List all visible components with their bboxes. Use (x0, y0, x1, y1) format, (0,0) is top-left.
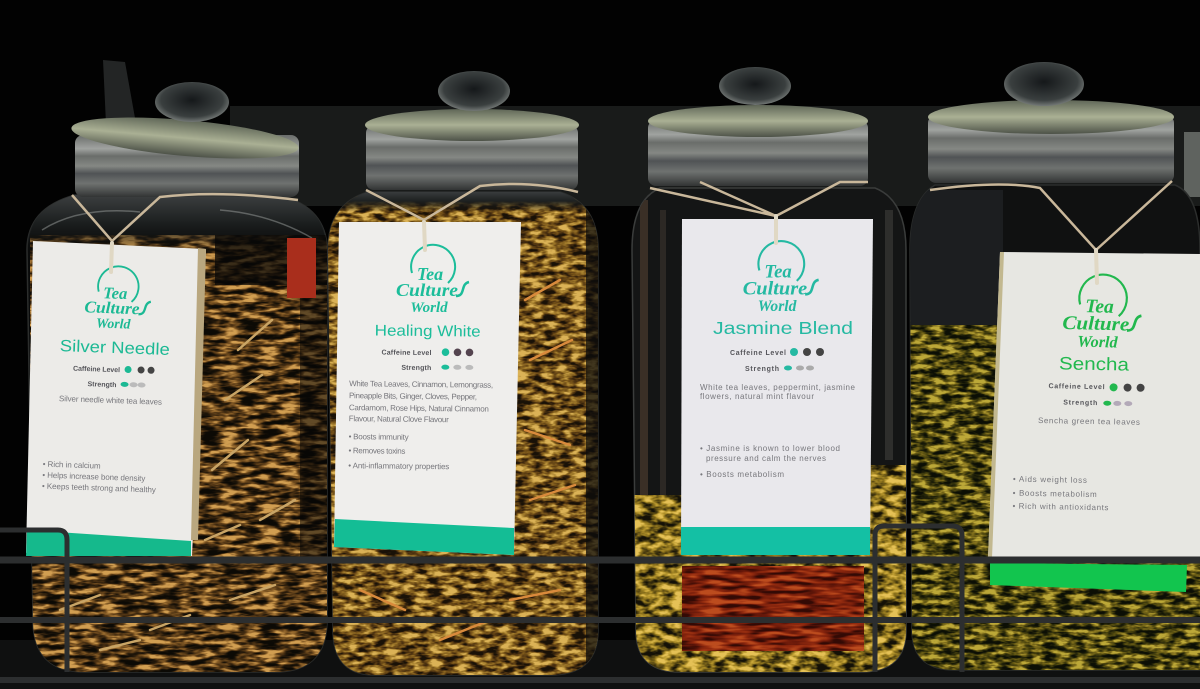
tag 3 text: pressure and calm the nerves (706, 454, 826, 463)
tag 1 logo: Culture (84, 297, 140, 318)
tag 1 text: • Helps increase bone density (42, 471, 145, 483)
tag 2 text: • Boosts immunity (349, 432, 409, 442)
tag 4 logo: World (1077, 332, 1119, 352)
tag 1 text: • Keeps teeth strong and healthy (42, 482, 156, 495)
tag 3 card (681, 219, 873, 555)
jar 3 (632, 67, 908, 675)
tag 4 colour band (990, 563, 1187, 592)
tag 4 text: • Boosts metabolism (1013, 489, 1097, 499)
tag 3 text: Jasmine Blend (713, 318, 853, 338)
tag 3 logo: World (758, 298, 797, 315)
tag 2 text: White Tea Leaves, Cinnamon, Lemongrass, (349, 379, 493, 390)
tag: Silver Needle (26, 241, 206, 556)
tag 4 logo (1062, 274, 1142, 352)
jar 2 leaf pieces (360, 280, 575, 640)
jar 3 contents (632, 200, 908, 675)
tag 1 text: Strength (87, 381, 117, 389)
jar 3 body (632, 188, 906, 672)
tag 3 logo (743, 241, 819, 315)
jar 4 neck (928, 115, 1174, 183)
jar 5 sliver (1184, 132, 1200, 197)
tag 2 text: • Anti-inflammatory properties (348, 461, 449, 471)
tag 1 card (26, 241, 206, 556)
tag 3 text: • Jasmine is known to lower blood (700, 444, 840, 453)
tag 4 edge (988, 252, 1004, 558)
jar 2 neck (366, 125, 578, 190)
tag 4 text: • Aids weight loss (1013, 475, 1087, 485)
tag 3 text: • Boosts metabolism (700, 470, 784, 479)
tag 2 text: Flavour, Natural Clove Flavour (349, 414, 449, 424)
tag 2 text: Strength (401, 365, 431, 372)
wire shelf rail (0, 526, 1200, 680)
jar 4 (908, 62, 1200, 675)
tag 4 text: • Rich with antioxidants (1012, 502, 1109, 512)
tag 1 colour band (26, 530, 191, 556)
jar 3 rope (650, 182, 868, 216)
jar 4 tea leaves (908, 190, 1200, 675)
tag 1 logo (84, 265, 152, 332)
tag 4 text: Strength (1063, 399, 1097, 407)
jar 2 tea leaves (320, 190, 600, 678)
jar 2 knob (438, 71, 510, 111)
tag 2 logo (396, 245, 469, 316)
red sticker (287, 238, 316, 298)
jar 2 lid (365, 109, 579, 141)
twine loops through tags (111, 216, 1097, 283)
jar 3 lid (648, 105, 868, 137)
tag 3 text: Caffeine Level (730, 350, 786, 357)
tag 4 card (988, 252, 1200, 560)
jar 2 body (328, 192, 598, 675)
jar 3 neck (648, 120, 868, 186)
tag 2 logo: Culture (396, 280, 458, 300)
tag 2 logo: Tea (417, 264, 443, 284)
tag: Sencha (988, 252, 1200, 592)
jar 4 rope (930, 181, 1172, 250)
tag 2 text: Healing White (375, 322, 481, 341)
tag 2 colour band (334, 519, 514, 555)
tag 2 text: Caffeine Level (381, 350, 432, 357)
tag 3 text (700, 318, 856, 479)
tag 3 text: White tea leaves, peppermint, jasmine (700, 383, 856, 392)
tag 1 logo: Tea (103, 283, 128, 303)
tag 2 card (334, 222, 521, 555)
tag 1 text: Silver needle white tea leaves (59, 394, 162, 407)
jar 2 (320, 71, 600, 678)
tag 1 logo: World (96, 315, 132, 332)
jar 1 knob (155, 82, 229, 122)
tag 3 logo: Culture (743, 278, 807, 299)
tag 4 text: Caffeine Level (1049, 383, 1105, 391)
tag 4 logo: Culture (1062, 313, 1130, 336)
tag 3 text: Strength (745, 366, 779, 373)
tag 1 text: Silver Needle (60, 337, 170, 359)
tag 1 text: Caffeine Level (73, 366, 120, 374)
tag 1 text: • Rich in calcium (43, 460, 101, 471)
jar 1 rope (72, 194, 298, 241)
jar 1 body (27, 195, 327, 672)
tag 2 text (348, 322, 494, 472)
tag 2 text: Pineapple Bits, Ginger, Cloves, Pepper, (349, 391, 477, 402)
tag 4 text: Sencha green tea leaves (1038, 416, 1140, 427)
tag 2 text: Cardamom, Rose Hips, Natural Cinnamon (349, 403, 489, 414)
tag 3 logo: Tea (764, 262, 792, 283)
jar 1 glass highlights (42, 210, 312, 238)
jar 3 knob (719, 67, 791, 105)
tag 4 text: Sencha (1059, 353, 1130, 375)
jar 4 body (910, 185, 1200, 670)
jar 4 knob (1004, 62, 1084, 106)
jar 1 tea leaves (27, 192, 330, 675)
jar 1 leaf needles (60, 320, 295, 650)
jar 1 lid (70, 110, 300, 166)
tag 3 text: flowers, natural mint flavour (700, 392, 814, 401)
tag 3 colour band (681, 527, 870, 555)
tag 2 text: • Removes toxins (348, 446, 406, 456)
tag 1 text (42, 337, 170, 495)
tag: Jasmine Blend (681, 219, 873, 555)
jar 1 neck (75, 135, 299, 197)
tag 2 logo: World (410, 300, 448, 316)
tag 4 text (1012, 353, 1145, 513)
jar 4 lid (928, 100, 1174, 134)
tag 1 edge (191, 248, 206, 540)
tag 4 logo: Tea (1085, 296, 1114, 318)
jar 2 rope (366, 184, 578, 220)
jar 1 (27, 82, 330, 675)
tag: Healing White (334, 222, 521, 555)
